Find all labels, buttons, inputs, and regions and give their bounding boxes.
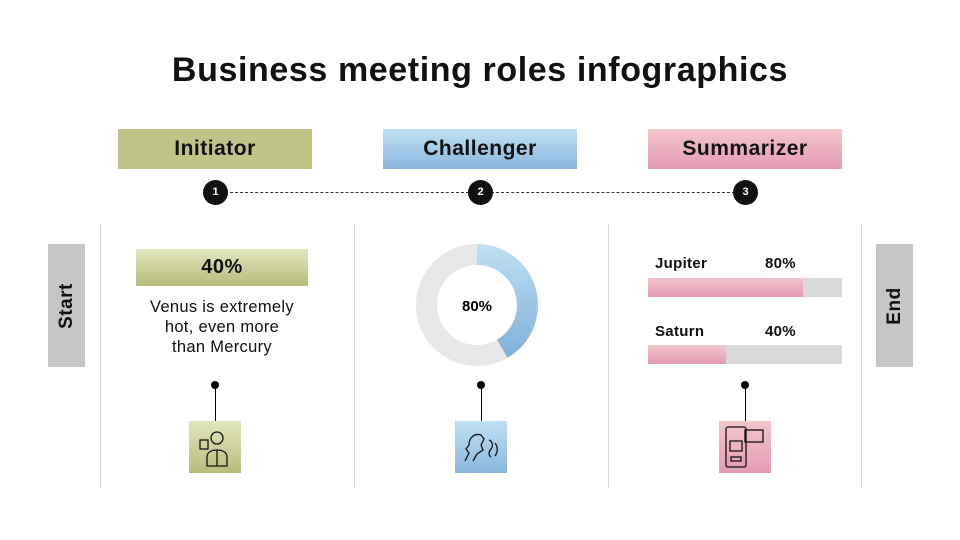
header: Summarizer: Summarizer <box>682 137 808 160</box>
start label: Start <box>56 283 76 328</box>
header: Summarizer <box>648 129 842 169</box>
step 3 <box>733 180 758 205</box>
icon: speaking ear <box>455 421 507 473</box>
header: Initiator <box>118 129 312 169</box>
step 2 <box>468 180 493 205</box>
header: Challenger <box>383 129 577 169</box>
end label <box>876 244 913 367</box>
progress: Jupiter: 80% <box>765 255 796 272</box>
text block <box>150 298 294 356</box>
percentage box 40% <box>136 249 308 286</box>
progress: Saturn: Saturn <box>655 323 704 340</box>
title: Business meeting roles infographics <box>172 51 788 89</box>
step 2: 2 <box>477 186 484 198</box>
text block: Venus is extremely <box>150 298 294 316</box>
step 1: 1 <box>212 186 219 198</box>
donut chart <box>416 244 538 366</box>
progress: Jupiter <box>648 255 842 297</box>
pin 2 <box>477 381 485 421</box>
header: Challenger: Challenger <box>423 137 537 160</box>
header: Initiator: Initiator <box>174 137 256 160</box>
text block: hot, even more <box>165 318 279 336</box>
end label: End <box>884 287 904 324</box>
progress: Jupiter: Jupiter <box>655 255 707 272</box>
progress: Saturn <box>648 323 842 364</box>
dashed timeline <box>215 192 745 193</box>
pin 3 <box>741 381 749 421</box>
pin 1 <box>211 381 219 421</box>
icon: phone with bag <box>719 421 771 473</box>
step 1 <box>203 180 228 205</box>
donut chart: 80% <box>462 298 492 315</box>
text block: than Mercury <box>172 338 272 356</box>
icon: person <box>189 421 241 473</box>
step 3: 3 <box>742 186 749 198</box>
progress: Saturn: 40% <box>765 323 796 340</box>
percentage box 40%: 40% <box>201 256 243 278</box>
start label <box>48 244 85 367</box>
